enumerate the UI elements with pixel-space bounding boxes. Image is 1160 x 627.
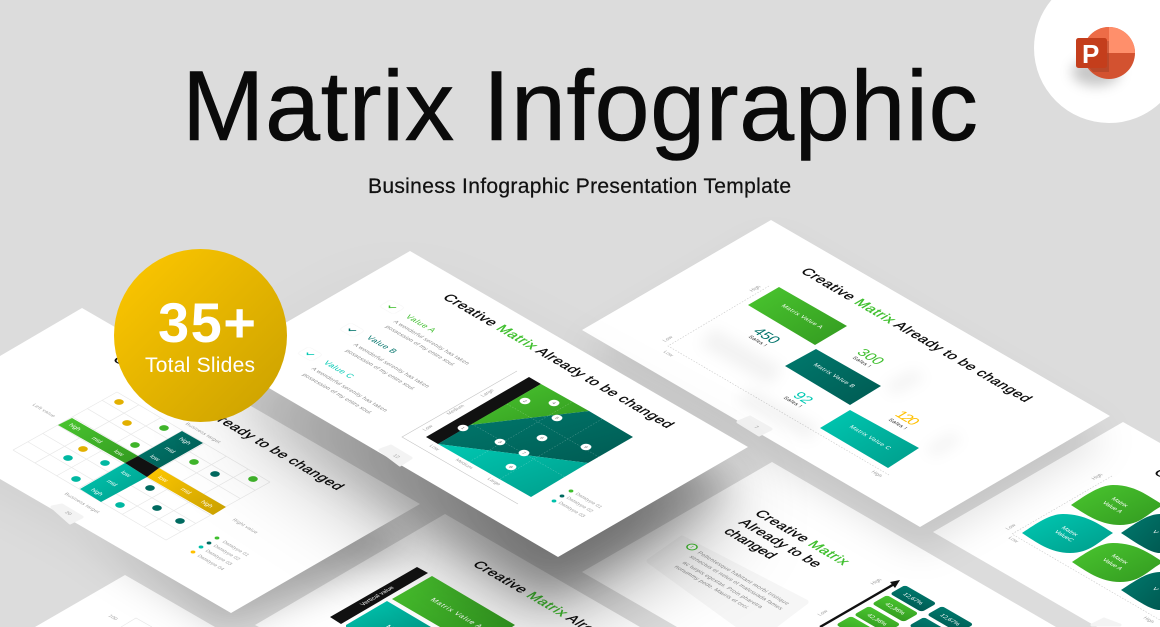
legend [552, 490, 604, 519]
leaf: value B bottom [1121, 572, 1160, 610]
green arm labels: mid [89, 436, 104, 444]
axis label high top: High [1091, 473, 1105, 481]
arm: dark teal [138, 431, 203, 468]
legend: Datatype 01 [573, 492, 604, 510]
stat 92 [781, 390, 816, 409]
icon: PowerPoint logo [1034, 0, 1160, 123]
value C body: possession of my entire soul. [300, 373, 374, 416]
leaf: value C [1022, 514, 1113, 553]
leaf: value B top [1121, 514, 1160, 553]
subtitle: Business Infographic Presentation Template [368, 175, 791, 198]
teal arm labels: high [89, 488, 105, 497]
slide title line 1: Creative Matrix [751, 508, 854, 567]
slide title: Creative Matrix Already to be changed [439, 292, 678, 430]
stat 450: Sales ! [746, 335, 768, 348]
stat 120: Sales ! [886, 418, 908, 431]
panel: text slide with percentage tiles [582, 462, 1056, 627]
icon: check A [380, 300, 404, 314]
block: matrix value A [748, 287, 847, 345]
legend: Datatype 04 [195, 554, 226, 572]
axis label high: High [749, 285, 763, 293]
matrix points: 8 [508, 465, 515, 469]
slide title: Creative Matrix Already to be changed [797, 266, 1036, 404]
leaf A label line 2: Value A [1100, 501, 1125, 515]
logo shadow [1072, 58, 1120, 86]
arrow: vertical axis [820, 580, 900, 627]
axis label high: High [870, 578, 884, 586]
y axis labels [422, 388, 496, 432]
stat 120: 120 [891, 409, 923, 428]
chart axes [402, 371, 518, 504]
vertical value label: Vertical value [359, 585, 397, 607]
value B body: possession of my entire soul. [343, 349, 417, 392]
block B label: Matrix Value B [811, 363, 857, 389]
yellow arm labels: mid [178, 487, 193, 495]
slide title line 2: Already to be [735, 517, 826, 569]
scatter dots [63, 399, 258, 524]
matrix points: 2 [522, 399, 529, 403]
main title: Matrix Infographic [182, 50, 978, 161]
matrix points: 4 [551, 401, 558, 405]
logo letter: P [1082, 39, 1099, 69]
block C label: Matrix Value C [847, 425, 893, 451]
tile dark 1 [890, 585, 937, 612]
grid [13, 392, 270, 540]
dark arm labels: mid [162, 446, 177, 454]
matrix: teal region [438, 444, 588, 497]
slide title line 3: changed [720, 526, 781, 561]
block: matrix value B [785, 349, 881, 405]
arm: green [58, 418, 138, 463]
tile green 1 [872, 595, 919, 622]
y axis labels: Large [480, 388, 496, 398]
chart axes [668, 286, 889, 475]
value B heading: Value B [364, 335, 400, 355]
page number: 12 [391, 454, 401, 460]
slide title: Creative Matrix Already to be changed [109, 354, 348, 492]
teal arm labels [89, 470, 133, 497]
label: business target top: Business target [183, 422, 222, 445]
vertical value bar [330, 567, 428, 624]
label: right value: Right value [230, 518, 259, 535]
teal arm labels: mid [104, 479, 119, 487]
yellow arm labels: low [156, 475, 170, 484]
stat 450: 450 [749, 326, 783, 346]
wide shadow: main slide [209, 311, 736, 617]
tile green 2 [854, 606, 901, 627]
y axis labels: Medium [446, 404, 466, 416]
tile dark 3 [909, 617, 956, 627]
block: matrix value C [346, 601, 431, 627]
leaf B2 label: V [1150, 587, 1160, 593]
value A body: A wonderful serenity has taken [391, 320, 470, 366]
legend: Datatype 02 [564, 496, 595, 514]
tile green 1: 42,36% [883, 602, 907, 616]
value A heading: Value A [403, 314, 439, 334]
leaf B label: V [1150, 530, 1160, 536]
matrix points: 5 [554, 416, 561, 420]
stat 92: 92 [789, 390, 816, 406]
block: matrix value A [392, 576, 515, 627]
x axis labels [427, 444, 502, 487]
icon: check B [340, 323, 364, 337]
leaf C label line 2: ValueC [1052, 530, 1076, 543]
badge circle [114, 249, 287, 422]
card body text: ac turpis egestas. Proin pharetra [680, 561, 764, 610]
axis label: 100 [106, 614, 119, 621]
matrix grid [469, 402, 602, 479]
value A body: possession of my entire soul. [383, 325, 457, 368]
axis label low: Low [817, 609, 830, 617]
slide sheet [933, 422, 1160, 627]
dark arm labels: high [177, 437, 193, 446]
axis label high: High [1141, 616, 1156, 624]
dark arm labels [148, 437, 193, 463]
page number: 20 [63, 511, 73, 517]
slide sheet [221, 251, 748, 557]
panel: right slide with leaf matrix [933, 422, 1160, 627]
card icon [685, 543, 699, 551]
panel: bottom-left slide [35, 575, 215, 627]
tile dark 1: 12,67% [901, 592, 925, 606]
shadow: left slide [0, 350, 414, 627]
dark arm labels: low [148, 454, 162, 463]
card icon: ! [688, 546, 695, 550]
slide sheet [582, 220, 1110, 527]
green arm labels [67, 423, 126, 458]
tile green 2: 42,36% [865, 613, 889, 627]
label: business target bottom: Business target [62, 492, 101, 515]
slide sheet [255, 514, 640, 627]
block: matrix value C [820, 410, 919, 468]
teal arm labels: low [119, 470, 133, 479]
badge number: 35+ [158, 291, 256, 354]
text card [649, 538, 806, 627]
axis label low left: Low [1005, 523, 1018, 531]
logo pie [1083, 27, 1135, 79]
x axis labels: Low [427, 444, 441, 452]
page tab [52, 505, 82, 523]
logo tile [1076, 38, 1107, 68]
leaf A2 label: Matrix [1109, 554, 1130, 565]
legend: Datatype 02 [211, 544, 242, 562]
matrix points [458, 398, 591, 470]
panel: bottom-centre slide [255, 514, 640, 627]
stat 300: Sales ! [850, 356, 872, 369]
centre cell [125, 456, 159, 477]
leaf A2 label line 2: Value A [1100, 558, 1125, 572]
matrix points: 7 [521, 451, 528, 455]
leaf C label: Matrix [1059, 526, 1080, 537]
legend: Datatype 03 [556, 501, 587, 519]
label: left value: Left value [30, 403, 57, 418]
panel: top-right slide with value blocks [582, 220, 1110, 527]
block A label: Matrix Value A [779, 304, 825, 330]
legend: Datatype 01 [220, 540, 251, 558]
yellow arm labels [156, 475, 215, 509]
green arm labels: high [67, 423, 83, 432]
card shadows [700, 328, 962, 456]
matrix points: 9 [583, 445, 590, 449]
page tab [380, 446, 411, 465]
matrix: dark teal region [438, 411, 633, 463]
axis label low: Low [1006, 536, 1020, 544]
card body text: Pellentesque habitant morbi tristique [695, 551, 790, 606]
chart axes [1012, 476, 1160, 620]
arm: teal [80, 463, 147, 502]
legend [191, 536, 251, 572]
value B body: A wonderful serenity has taken [351, 343, 430, 389]
axis label high right: High [869, 470, 884, 478]
value C heading: Value C [321, 360, 356, 380]
arm: yellow [147, 468, 226, 515]
card body text: nonummy pede. Mauris et orci. [672, 565, 751, 610]
shadow: top-right slide [582, 245, 1110, 551]
leaf: value A top [1071, 485, 1160, 525]
stat 92: Sales ! [781, 396, 803, 409]
page tab [738, 417, 771, 435]
axis label low: Low [661, 350, 675, 358]
shadow: main slide [209, 293, 736, 599]
value C body: A wonderful serenity has taken [309, 367, 388, 413]
badge: 35+ total slides [114, 249, 287, 422]
leaf: value A bottom [1072, 543, 1160, 582]
stat 300: 300 [853, 347, 887, 367]
icon: check C [298, 347, 322, 361]
matrix: green region [470, 384, 589, 425]
page number: 7 [752, 425, 760, 430]
slide sheet [582, 462, 1056, 627]
slide sheet [0, 308, 420, 613]
axis label low left: Low [662, 335, 675, 343]
green arm labels: low [112, 449, 126, 458]
card body text: senectus et netus et malesuada fames [687, 555, 784, 611]
chart axis [121, 618, 152, 627]
x axis labels: Large [485, 477, 502, 487]
page tab [1092, 619, 1120, 625]
tile dark 2 [927, 606, 974, 627]
y axis labels: Low [422, 424, 435, 432]
matrix: black band [426, 377, 541, 444]
panel: left slide with cross matrix [0, 308, 420, 613]
panel: main centre slide [221, 251, 748, 557]
legend: Datatype 03 [203, 549, 234, 567]
tile green 3 [836, 616, 883, 627]
x axis labels: Medium [453, 458, 474, 470]
yellow arm labels: high [199, 500, 215, 509]
white circle [1034, 0, 1160, 123]
matrix points: 3 [497, 440, 504, 444]
slide sheet [35, 575, 215, 627]
leaf A label: Matrix [1109, 497, 1130, 508]
matrix points: 1 [460, 426, 467, 430]
badge caption: Total Slides [145, 354, 255, 377]
matrix points: 6 [539, 436, 546, 440]
tile dark 2: 12,67% [938, 613, 962, 627]
